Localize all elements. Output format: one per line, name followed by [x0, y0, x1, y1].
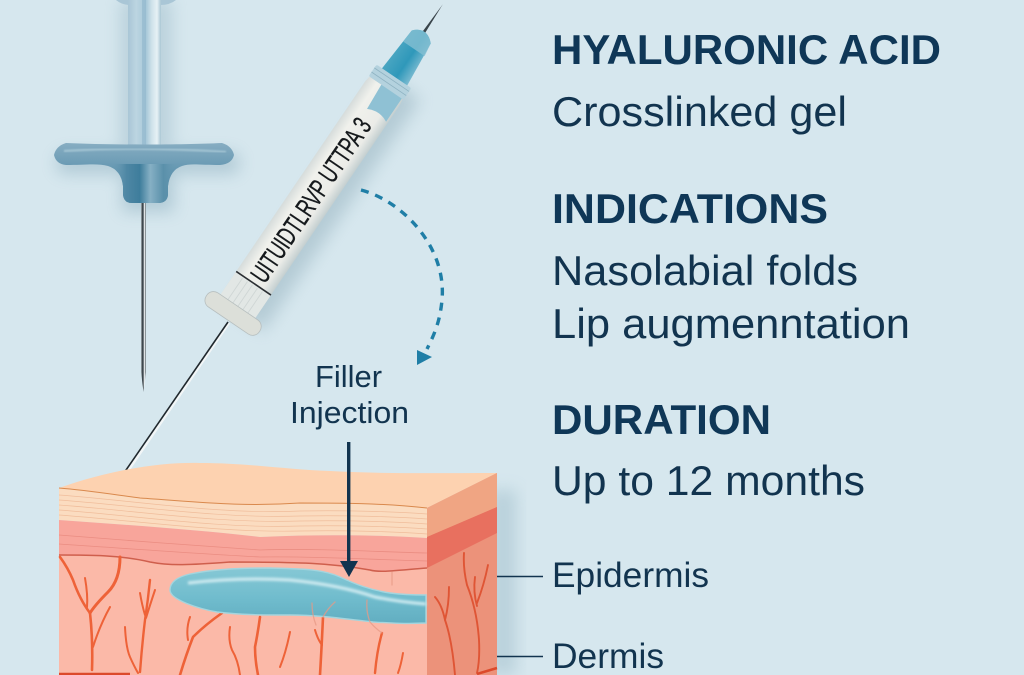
dermis: [59, 540, 427, 675]
text block: duration: [552, 396, 865, 504]
plunger top cap: [116, 0, 176, 5]
plunger tube: [128, 0, 161, 146]
upper needle: [422, 4, 444, 34]
flange stem shading: [112, 164, 178, 203]
barrel: [219, 71, 407, 320]
vessels front: [60, 557, 403, 675]
text block: hyaluronic acid: HYALURONIC ACID: [552, 26, 941, 73]
basement line: [59, 555, 427, 571]
bottom vessel: [59, 668, 497, 674]
wavy papillary lines: [59, 535, 427, 561]
dashed arc: [361, 190, 442, 349]
gel highlight: [188, 579, 426, 604]
cone outer sheath: [403, 25, 436, 56]
side upper stratum: [427, 473, 497, 537]
text block: hyaluronic acid: [552, 26, 941, 135]
text block: duration: Up to 12 months: [552, 457, 865, 504]
text block: indications: [552, 185, 910, 347]
lower needle: [124, 322, 229, 474]
text block: duration: DURATION: [552, 396, 771, 443]
arrow head: [417, 350, 432, 365]
epidermis strata lines: [59, 495, 427, 534]
side face: [427, 473, 497, 675]
papillary layer: [59, 520, 427, 571]
barrel base: [219, 271, 271, 320]
vessels side: [435, 553, 488, 675]
plunger shadow: [56, 0, 240, 212]
label: epidermis: Epidermis: [552, 556, 709, 595]
label: filler injection: Injection: [290, 395, 409, 430]
collar: [369, 65, 411, 100]
block shadow: [490, 490, 516, 675]
blue liquid in barrel: [365, 81, 404, 122]
finger flange: [54, 143, 234, 203]
dashed curved arrow: [361, 190, 442, 365]
text block: indications: Nasolabial folds: [552, 247, 858, 294]
label: filler injection: Filler: [315, 359, 382, 394]
side red band: [427, 507, 497, 568]
blue cone: [376, 23, 438, 94]
plunger syringe: [54, 0, 240, 392]
label: filler injection: [290, 359, 409, 430]
epidermis layer: [59, 488, 427, 538]
base flange: [202, 288, 264, 338]
flange sheen: [64, 149, 226, 152]
surface line: [59, 488, 427, 508]
arrow shaft: [347, 442, 350, 567]
base ribs: [228, 278, 262, 313]
needle vertical: [141, 203, 146, 392]
text block: hyaluronic acid: Crosslinked gel: [552, 88, 847, 135]
vessels through gel: [312, 572, 392, 633]
graduation line: [236, 271, 271, 295]
text block: indications: Lip augmenntation: [552, 300, 910, 347]
injection arrow: [340, 442, 358, 577]
barrel text: UITUIDTLRVP UTTPA 3: [245, 112, 377, 288]
plunger inner rod: [142, 0, 146, 146]
gel implant: [170, 568, 426, 623]
skin cross section: [59, 463, 516, 675]
skin surface: [59, 463, 497, 508]
label: dermis: Dermis: [552, 637, 664, 675]
angled syringe shadow: [228, 76, 420, 332]
collar ribs: [371, 68, 409, 96]
arrow tip: [340, 561, 358, 577]
text block: indications: INDICATIONS: [552, 185, 828, 232]
angled syringe: [202, 0, 469, 338]
